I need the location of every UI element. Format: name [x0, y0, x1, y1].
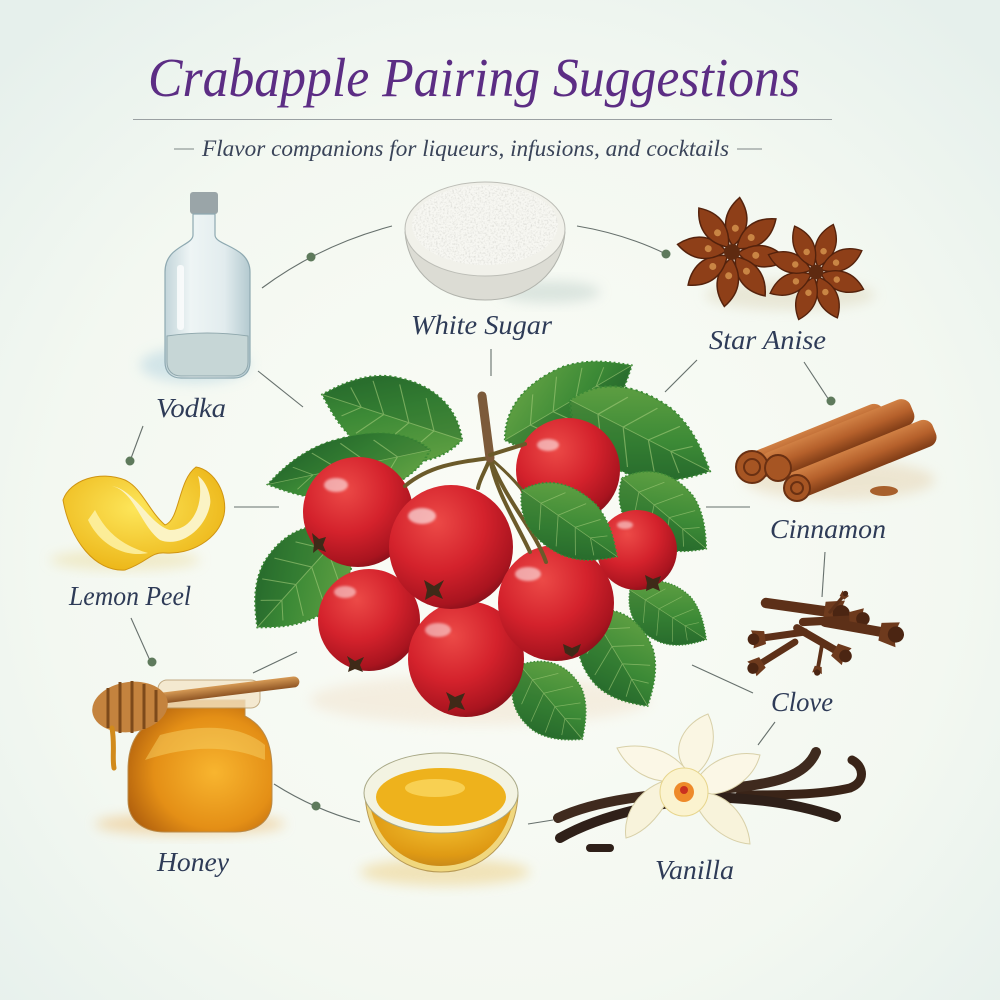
label: White Sugar: White Sugar [411, 310, 553, 340]
title: Crabapple Pairing Suggestions [148, 47, 800, 108]
label: Cinnamon: Cinnamon [770, 514, 886, 544]
label: Vodka: Vodka [156, 393, 226, 423]
icon: vanilla with flower [558, 714, 862, 848]
label: Honey: Honey [156, 847, 229, 877]
label: Vanilla: Vanilla [655, 855, 734, 885]
label: Star Anise: Star Anise [709, 325, 826, 355]
icon: lemon peel [50, 467, 225, 570]
connector lines [126, 226, 836, 824]
icon: star anise [670, 190, 881, 337]
subtitle: Flavor companions for liqueurs, infusions, and cocktails [201, 136, 729, 161]
icon: cinnamon sticks [736, 396, 940, 502]
centerpiece: crabapple cluster [227, 335, 728, 761]
icon: white sugar bowl [405, 182, 600, 303]
icon: vodka bottle [140, 192, 250, 383]
front leaf [504, 464, 635, 583]
icon: cloves [744, 589, 906, 679]
icon: honey bowl [360, 753, 530, 886]
apples [303, 418, 677, 717]
leaves [227, 335, 728, 761]
label: Clove: Clove [771, 687, 833, 717]
icon: honey jar with dipper [89, 676, 300, 835]
label: Lemon Peel: Lemon Peel [68, 581, 191, 611]
stems [405, 396, 546, 562]
